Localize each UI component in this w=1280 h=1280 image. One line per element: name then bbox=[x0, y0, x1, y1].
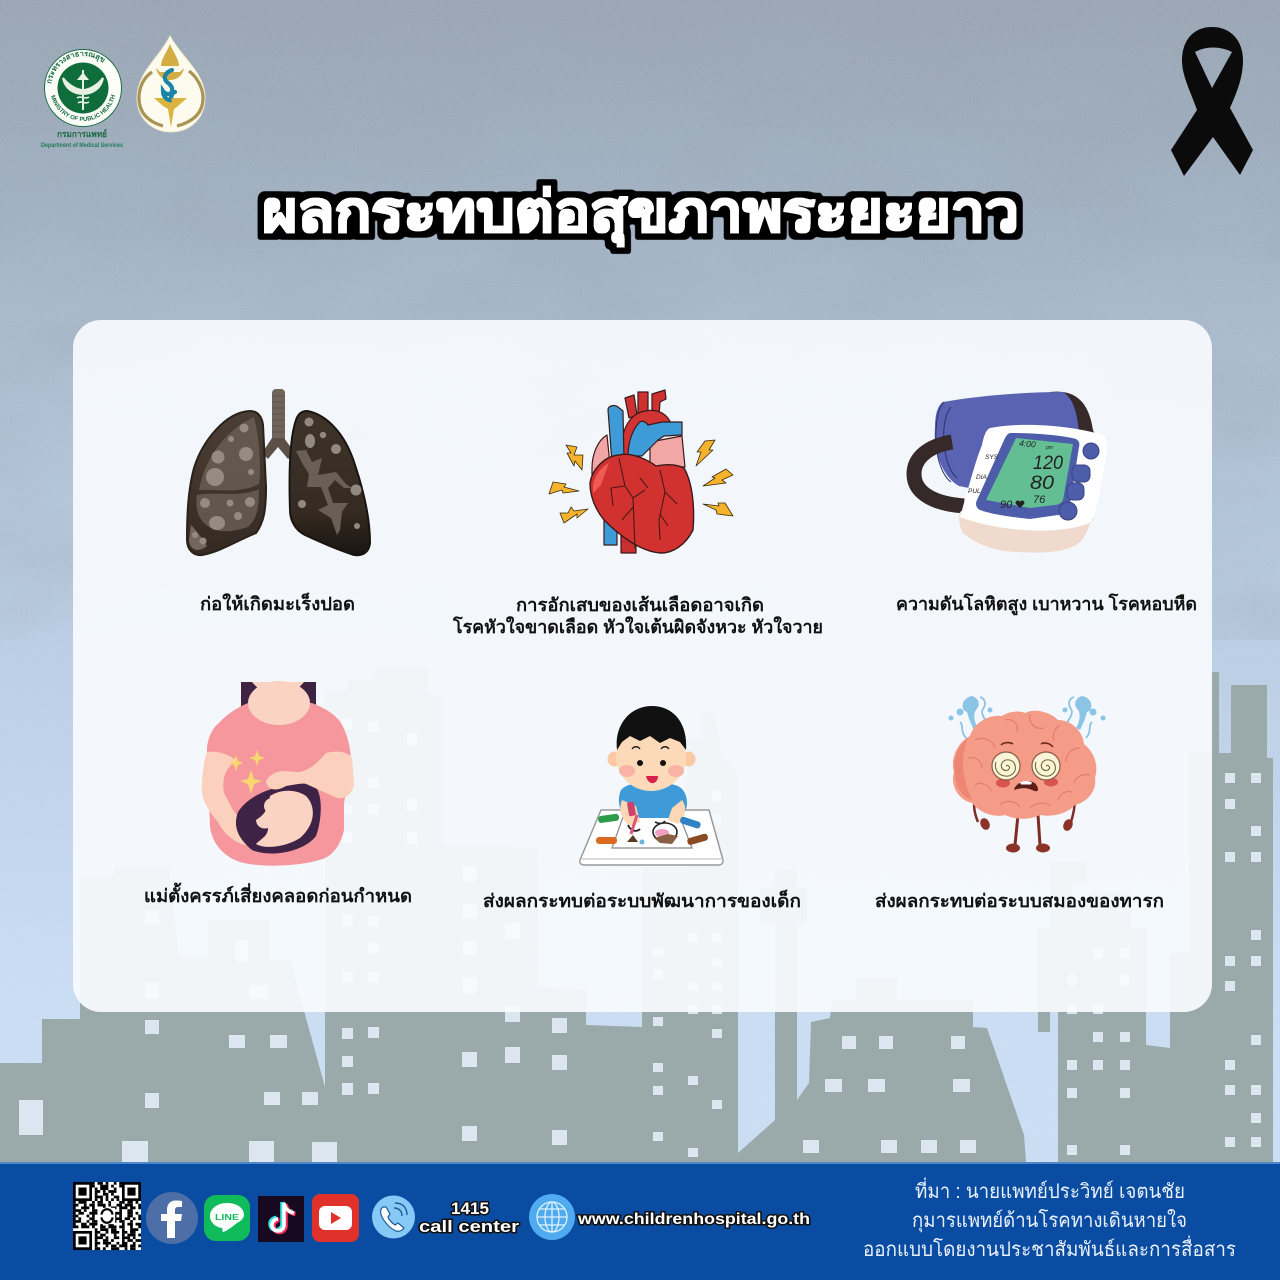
logo: Ministry of Public Health: กระทรวงสาธารณสุข bbox=[47, 52, 105, 84]
icon: blackened lungs bbox=[187, 389, 370, 555]
caption: hypertension, diabetes, asthma: ความดันโลหิตสูง เบาหวาน โรคหอบหืด bbox=[896, 593, 1197, 616]
logo: Ministry of Public Health: Department of Medical Services bbox=[41, 143, 124, 149]
icon: blood pressure monitor: DIA bbox=[976, 474, 987, 481]
footer bar bbox=[0, 1162, 1280, 1280]
icon: dizzy brain bbox=[948, 696, 1106, 852]
city skyline bbox=[0, 668, 1273, 1163]
icon: LINE: LINE bbox=[215, 1212, 239, 1222]
call center text: 1415 bbox=[451, 1199, 489, 1218]
source credits: กุมารแพทย์ด้านโรคทางเดินหายใจ bbox=[912, 1209, 1187, 1233]
icon: blood pressure monitor bbox=[914, 392, 1107, 553]
icon: blood pressure monitor: 80 bbox=[1030, 473, 1054, 494]
logo: Department of Medical Services drop bbox=[137, 36, 205, 132]
icon: blood pressure monitor: SYS bbox=[985, 454, 999, 461]
icon: black mourning ribbon bbox=[1171, 27, 1253, 176]
call center text: call center bbox=[419, 1217, 519, 1236]
logo: Ministry of Public Health: กรมการแพทย์ bbox=[57, 128, 107, 139]
caption: child development: ส่งผลกระทบต่อระบบพัฒนาการของเด็ก bbox=[483, 889, 801, 911]
icon: Facebook bbox=[146, 1192, 198, 1244]
icon: inflamed heart bbox=[549, 390, 733, 553]
icon: blood pressure monitor: 4:00 bbox=[1019, 438, 1036, 449]
caption: infant brain: ส่งผลกระทบต่อระบบสมองของทารก bbox=[875, 891, 1164, 911]
source credits bbox=[863, 1177, 1236, 1261]
icon: blood pressure monitor: 76 bbox=[1033, 494, 1046, 506]
source credits: ออกแบบโดยงานประชาสัมพันธ์และการสื่อสาร bbox=[863, 1235, 1236, 1261]
call center text bbox=[419, 1199, 519, 1236]
caption: vascular inflammation: โรคหัวใจขาดเลือด หัวใจเต้นผิดจังหวะ หัวใจวาย bbox=[452, 616, 823, 637]
icon: YouTube bbox=[312, 1194, 359, 1242]
icon: blood pressure monitor: 120 bbox=[1033, 453, 1063, 474]
panel: health effects card bbox=[73, 320, 1212, 1012]
icon: TikTok bbox=[258, 1196, 304, 1242]
source credits: ที่มา : นายแพทย์ประวิทย์ เจตนชัย bbox=[915, 1177, 1185, 1203]
icon: globe bbox=[529, 1194, 575, 1240]
icon: blood pressure monitor: PUL bbox=[968, 488, 981, 495]
icon: blood pressure monitor: 90 bbox=[1000, 499, 1013, 511]
caption: pregnancy risk: แม่ตั้งครรภ์เสี่ยงคลอดก่อนกำหนด bbox=[144, 882, 412, 906]
logo: Ministry of Public Health: MINISTRY OF PUBLIC HEALTH bbox=[51, 94, 116, 121]
title: ผลกระทบต่อสุขภาพระยะยาว bbox=[262, 180, 1019, 247]
icon: blood pressure monitor: pm bbox=[1045, 445, 1053, 451]
logo: Ministry of Public Health bbox=[41, 49, 124, 149]
icon: boy drawing bbox=[580, 706, 723, 865]
caption: lung cancer: ก่อให้เกิดมะเร็งปอด bbox=[200, 592, 355, 614]
caption: vascular inflammation: การอักเสบของเส้นเลือดอาจเกิด bbox=[516, 595, 764, 615]
icon: LINE bbox=[204, 1195, 250, 1241]
QR code bbox=[73, 1182, 141, 1250]
caption: vascular inflammation bbox=[452, 595, 823, 637]
icon: pregnant woman with fetus bbox=[202, 681, 354, 866]
icon: phone bbox=[372, 1196, 415, 1238]
website address: www.childrenhospital.go.th bbox=[577, 1211, 810, 1228]
